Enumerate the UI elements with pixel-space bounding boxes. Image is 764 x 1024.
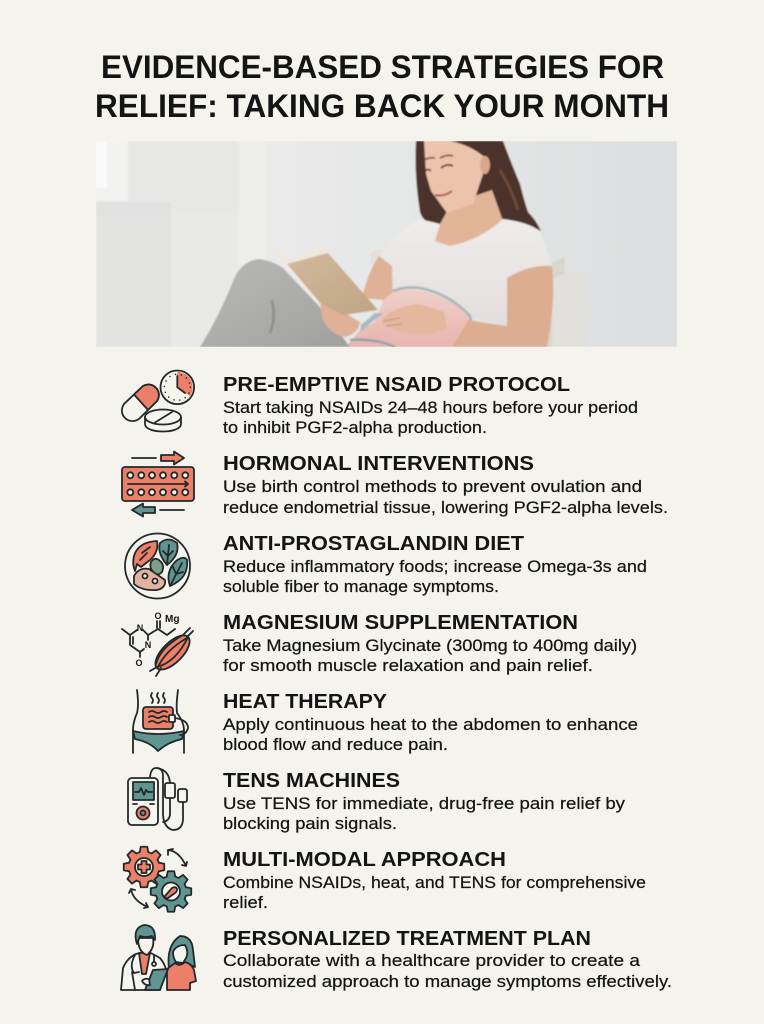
- icon: magnesium molecule and muscle: O: [135, 658, 143, 668]
- hair: [416, 141, 541, 231]
- icon: plate of salmon, greens and nuts: [125, 534, 190, 598]
- infographic page: [96, 55, 677, 991]
- description: Apply continuous heat to the abdomen to enhance: [223, 716, 638, 734]
- description: Start taking NSAIDs 24–48 hours before your period: [223, 399, 638, 417]
- description: [223, 874, 646, 912]
- description: [223, 716, 638, 754]
- row: magnesium supplementation: [122, 611, 637, 676]
- leg: [200, 259, 350, 347]
- description: [223, 558, 647, 596]
- heading: PRE-EMPTIVE NSAID PROTOCOL: [223, 374, 570, 396]
- title: [95, 49, 669, 124]
- description: customized approach to manage symptoms effectively.: [223, 973, 672, 991]
- near arm: [440, 266, 553, 347]
- hand on book: [320, 300, 360, 337]
- description: soluble fiber to manage symptoms.: [223, 578, 499, 596]
- icon: magnesium molecule and muscle: N: [145, 640, 151, 650]
- row: heat therapy: [133, 690, 638, 754]
- face: [424, 141, 484, 213]
- heading: MULTI-MODAL APPROACH: [223, 849, 506, 871]
- row: TENS machines: [128, 768, 626, 833]
- description: Reduce inflammatory foods; increase Omega-3s and: [223, 558, 647, 576]
- heading: ANTI-PROSTAGLANDIN DIET: [223, 533, 524, 555]
- description: blocking pain signals.: [223, 815, 397, 833]
- description: relief.: [223, 894, 268, 912]
- far arm: [362, 256, 393, 301]
- book page edge: [285, 263, 321, 304]
- heading: TENS MACHINES: [223, 770, 400, 792]
- icon: TENS device with electrodes: [128, 768, 187, 830]
- heading: PERSONALIZED TREATMENT PLAN: [223, 928, 591, 950]
- title: EVIDENCE-BASED STRATEGIES FOR: [101, 49, 664, 85]
- icon: birth control blister pack with arrows: [122, 452, 194, 516]
- description: Combine NSAIDs, heat, and TENS for comprehensive: [223, 874, 646, 892]
- row: personalized treatment plan: [121, 925, 672, 991]
- description: [223, 637, 637, 675]
- book cover: [287, 253, 378, 315]
- shirt: [412, 218, 552, 266]
- heading: HORMONAL INTERVENTIONS: [223, 453, 534, 475]
- description: reduce endometrial tissue, lowering PGF2-alpha levels.: [223, 499, 668, 517]
- description: Use TENS for immediate, drug-free pain relief by: [223, 795, 626, 813]
- description: for smooth muscle relaxation and pain relief.: [223, 657, 593, 675]
- icon: doctor and patient: [121, 925, 196, 990]
- icon: gears with medical cross and pill: [124, 847, 191, 912]
- icon: magnesium molecule and muscle: O: [154, 611, 162, 621]
- title: RELIEF: TAKING BACK YOUR MONTH: [95, 88, 669, 124]
- row: hormonal interventions: [122, 452, 668, 517]
- icon: capsule, clock and tablet: [122, 370, 194, 432]
- photo: woman reading with heat pad: [96, 141, 677, 347]
- description: blood flow and reduce pain.: [223, 736, 448, 754]
- heading: MAGNESIUM SUPPLEMENTATION: [223, 612, 578, 634]
- icon: magnesium molecule and muscle: N: [137, 623, 143, 633]
- icon: magnesium molecule and muscle: [122, 611, 195, 676]
- heat pad: [346, 289, 470, 347]
- description: to inhibit PGF2-alpha production.: [223, 419, 487, 437]
- row: multi-modal approach: [124, 847, 646, 912]
- icon: heat pad on abdomen: [133, 690, 188, 753]
- description: [223, 795, 626, 833]
- description: [223, 952, 672, 991]
- description: Take Magnesium Glycinate (300mg to 400mg daily): [223, 637, 637, 655]
- description: Collaborate with a healthcare provider to create a: [223, 952, 641, 970]
- description: Use birth control methods to prevent ovulation and: [223, 478, 642, 496]
- heading: HEAT THERAPY: [223, 691, 388, 713]
- book pages: [272, 246, 329, 264]
- back pillow: [370, 250, 382, 265]
- description: [223, 478, 668, 517]
- icon: magnesium molecule and muscle: Mg: [165, 614, 179, 625]
- hand on pad: [382, 304, 447, 334]
- row: anti-prostaglandin diet: [125, 533, 647, 598]
- row: pre-emptive NSAID protocol: [122, 370, 638, 437]
- description: [223, 399, 638, 437]
- neck: [435, 190, 503, 246]
